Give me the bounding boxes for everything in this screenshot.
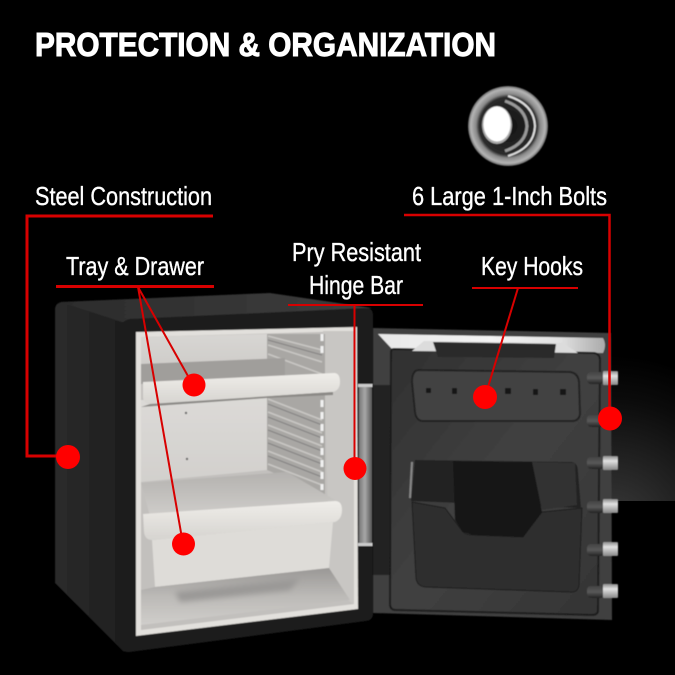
callout: large bolts: 6 Large 1-Inch Bolts bbox=[412, 181, 607, 211]
callout: pry resistant hinge bar: Pry Resistant bbox=[292, 237, 422, 267]
handle recess bbox=[433, 342, 556, 358]
key hooks bbox=[426, 388, 566, 395]
drawer front bar bbox=[143, 501, 342, 540]
inner door panel bbox=[390, 349, 600, 615]
open door bbox=[373, 328, 618, 620]
door outer shell bbox=[373, 328, 612, 620]
door handle bbox=[412, 341, 578, 353]
tray front bar bbox=[143, 373, 340, 404]
drawer body bbox=[152, 522, 333, 587]
tray back bbox=[141, 358, 285, 384]
pocket centre cavity bbox=[453, 461, 542, 537]
key hook panel bbox=[412, 370, 580, 421]
callout: pry resistant hinge bar: Hinge Bar bbox=[309, 270, 403, 300]
background glow behind door bbox=[560, 310, 675, 501]
lower pocket flap bbox=[412, 502, 582, 592]
pocket highlight bbox=[410, 462, 412, 498]
right side wall bbox=[323, 331, 354, 604]
back wall upper bbox=[141, 334, 267, 364]
door left strip bbox=[373, 385, 390, 575]
upper pocket dark block bbox=[411, 460, 581, 508]
pocket right block bbox=[532, 462, 577, 510]
callout: steel construction: Steel Construction bbox=[35, 181, 212, 211]
safe body bbox=[55, 293, 373, 652]
callout: key hooks bbox=[472, 251, 583, 409]
shelf rails bbox=[267, 334, 325, 495]
shadow beneath drawer bbox=[175, 578, 300, 602]
back wall middle bbox=[141, 396, 267, 482]
floor bbox=[141, 568, 350, 625]
callout: large bolts bbox=[404, 181, 622, 430]
body side bbox=[55, 302, 124, 652]
hinge bar bbox=[359, 384, 372, 546]
body top bbox=[60, 293, 372, 322]
callout: steel construction bbox=[27, 181, 213, 469]
callout: pry resistant hinge bar bbox=[288, 237, 423, 480]
interior cavity bbox=[141, 331, 354, 630]
top silver band bbox=[378, 334, 605, 353]
body front frame bbox=[122, 308, 373, 652]
title: PROTECTION & ORGANIZATION bbox=[35, 26, 496, 63]
icon: bolt close-up bbox=[468, 86, 548, 166]
callout: tray and drawer bbox=[56, 251, 214, 556]
tray underside shadow bbox=[141, 392, 333, 407]
door bolts bbox=[587, 371, 618, 598]
callout: tray and drawer: Tray & Drawer bbox=[66, 251, 204, 281]
drawer inside bbox=[141, 472, 335, 516]
callout: key hooks: Key Hooks bbox=[481, 251, 583, 281]
white inner frame bbox=[136, 327, 358, 636]
tray screw details bbox=[185, 412, 187, 414]
